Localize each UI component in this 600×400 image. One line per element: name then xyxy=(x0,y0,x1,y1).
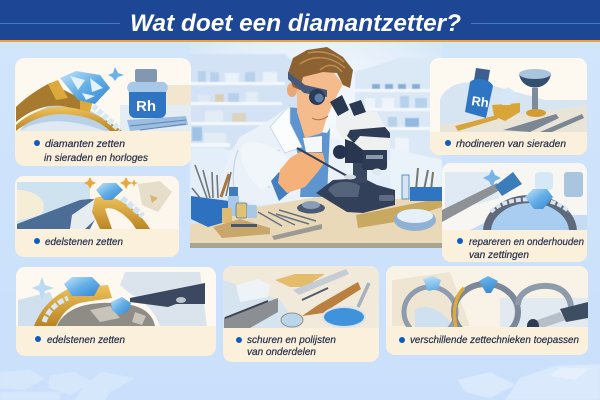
lab coat xyxy=(220,105,347,205)
label text: rhodineren van sieraden xyxy=(456,138,566,150)
label text: edelstenen zetten xyxy=(45,236,123,248)
loupe lens xyxy=(309,89,325,105)
workshop background with shelves xyxy=(190,42,442,247)
icon: sparkle xyxy=(483,169,501,187)
small dish xyxy=(297,201,325,214)
icon: gemstone xyxy=(525,189,553,209)
label text line 2: in sieraden en horloges xyxy=(44,152,149,164)
icon: rhodium bottle: Rh xyxy=(471,93,490,110)
panel image xyxy=(430,58,587,132)
small diamonds xyxy=(93,106,120,130)
head xyxy=(336,110,390,150)
microscope xyxy=(316,95,395,213)
panel: schuren en polijsten van onderdelen xyxy=(223,266,379,362)
eyepieces xyxy=(330,95,366,116)
panel: edelstenen zetten (2) xyxy=(16,267,216,356)
panel: edelstenen zetten xyxy=(15,176,179,257)
icon: tool xyxy=(527,302,588,327)
icon: gold ring xyxy=(34,285,112,326)
icon: rhodium bottle xyxy=(465,68,493,118)
column xyxy=(353,155,367,183)
label text: schuren en polijsten xyxy=(247,334,336,346)
panel image xyxy=(442,163,587,267)
hair xyxy=(288,47,353,90)
wooden block xyxy=(356,198,442,228)
label text line 2: van onderdelen xyxy=(247,346,316,358)
icon: diamond xyxy=(64,277,100,296)
label text line 2: van zettingen xyxy=(469,249,529,261)
decoration: pale diamonds bottom left xyxy=(0,370,135,400)
loupe headband xyxy=(288,72,327,97)
panel: diamanten zetten in sieraden en horloges xyxy=(15,58,191,166)
decoration: pale diamonds bottom right xyxy=(458,364,600,400)
label text: edelstenen zetten xyxy=(47,334,125,346)
panel image xyxy=(15,58,191,131)
label text: repareren en onderhouden xyxy=(469,236,584,248)
icon: sparkle xyxy=(108,67,124,81)
panel: rhodineren van sieraden xyxy=(430,58,587,155)
bullet xyxy=(236,337,242,343)
icon: sandpaper xyxy=(275,274,325,287)
panel: repareren en onderhouden van zettingen xyxy=(442,163,587,267)
icon: small gem xyxy=(281,313,303,327)
label text: diamanten zetten xyxy=(45,138,125,150)
objective xyxy=(362,148,387,176)
panel image xyxy=(386,266,588,327)
icon: tool handle xyxy=(455,115,498,131)
icon: rhodium bottle: Rh xyxy=(136,98,156,115)
blue pot with tools xyxy=(402,168,442,201)
icon: diamond xyxy=(60,71,110,104)
icon: polishing stand xyxy=(519,69,551,117)
icon: ring xyxy=(486,197,574,267)
white block xyxy=(236,279,270,302)
bullet xyxy=(34,238,40,244)
icon: pencil tool xyxy=(293,269,349,295)
focus knob xyxy=(333,137,363,163)
central scene: diamond setter at microscope xyxy=(190,42,442,248)
icon: file block xyxy=(224,298,278,328)
icon: three rings xyxy=(402,282,574,327)
icon: diamonds xyxy=(423,276,498,293)
icon: rhodium bottle xyxy=(127,69,168,118)
bottles xyxy=(222,187,257,223)
bullet xyxy=(35,336,41,342)
panel: verschillende zettechnieken toepassen xyxy=(386,266,588,355)
label text: verschillende zettechnieken toepassen xyxy=(410,334,579,346)
icon: files xyxy=(503,114,584,132)
panel image xyxy=(16,267,216,326)
icon: stone xyxy=(57,303,155,326)
coat lapel xyxy=(270,105,302,153)
base xyxy=(316,178,395,213)
icon: magnifier blue disk xyxy=(323,283,369,327)
cuff xyxy=(271,172,291,201)
title banner xyxy=(0,0,600,42)
small diamonds xyxy=(44,298,68,322)
icon: pliers xyxy=(17,199,95,229)
coat shading xyxy=(233,150,280,198)
icon: gold holder with gem xyxy=(492,87,520,121)
bullet xyxy=(445,140,451,146)
bullet xyxy=(457,238,463,244)
bullet xyxy=(399,337,405,343)
icon: spray bottles xyxy=(535,172,583,197)
ear xyxy=(287,83,297,97)
workbench xyxy=(190,197,442,244)
icon: sparkle xyxy=(32,277,54,300)
icon: diamond xyxy=(96,183,123,200)
icon: gold ring xyxy=(92,197,150,229)
sleeve xyxy=(241,142,290,190)
hand with tweezers xyxy=(278,148,356,193)
neck and face xyxy=(290,62,343,138)
title: Wat doet een diamantzetter? xyxy=(130,10,461,37)
small pen xyxy=(302,288,328,300)
icon: brush xyxy=(442,172,522,222)
panel image xyxy=(15,176,179,229)
tool tray xyxy=(213,219,270,238)
blue tool holder xyxy=(191,165,231,227)
icon: wooden tool xyxy=(302,282,361,316)
polishing dish xyxy=(394,209,436,231)
small diamonds xyxy=(122,198,143,216)
bullet xyxy=(34,140,40,146)
icon: tweezers xyxy=(130,283,205,307)
panel image xyxy=(223,266,379,328)
tools and ruler xyxy=(258,210,322,240)
icon: gold ring xyxy=(16,83,80,122)
icon: sparkles xyxy=(84,177,138,189)
shirt xyxy=(288,107,330,197)
